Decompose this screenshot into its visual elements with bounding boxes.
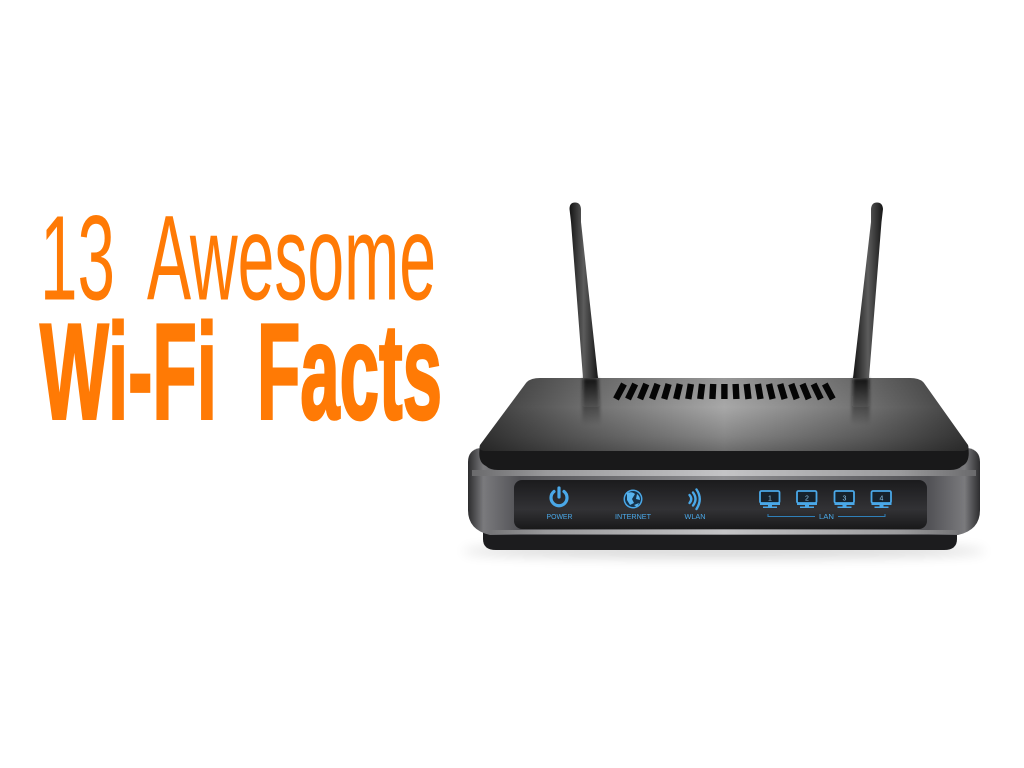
title word: 13: 13 <box>40 190 115 326</box>
title word: Awesome: Awesome <box>147 190 436 326</box>
label: WLAN: WLAN <box>684 514 706 521</box>
icon: power <box>551 488 567 506</box>
label: LAN: LAN <box>819 514 834 521</box>
icon: lan port 4 <box>872 491 892 508</box>
label: POWER: POWER <box>546 514 572 521</box>
router base <box>483 525 957 550</box>
label: INTERNET: INTERNET <box>615 514 652 521</box>
icon: lan port 4: 4 <box>880 496 884 502</box>
lan bracket <box>768 514 885 516</box>
router body <box>468 448 980 535</box>
icon: lan port 3 <box>834 491 854 508</box>
title <box>40 190 442 448</box>
right antenna <box>853 202 883 378</box>
icon: internet globe <box>624 490 642 508</box>
icon: wlan waves <box>690 490 700 509</box>
icon: lan port 2 <box>797 491 817 508</box>
title word: Facts: Facts <box>257 296 442 448</box>
router shadow <box>462 544 986 558</box>
left antenna <box>570 202 598 378</box>
vent slits <box>616 384 833 399</box>
silver edge highlights <box>472 470 976 534</box>
lid top surface <box>480 378 968 451</box>
icon: lan port 2: 2 <box>805 496 809 502</box>
icon: lan port 1 <box>760 491 780 508</box>
lid front edge <box>479 446 969 470</box>
icon: lan port 1: 1 <box>768 496 772 502</box>
front panel <box>514 480 927 529</box>
icon: lan port 3: 3 <box>843 496 847 502</box>
router illustration <box>462 202 986 558</box>
title word: Wi-Fi: Wi-Fi <box>40 296 217 448</box>
antenna reflections on lid <box>582 378 870 425</box>
